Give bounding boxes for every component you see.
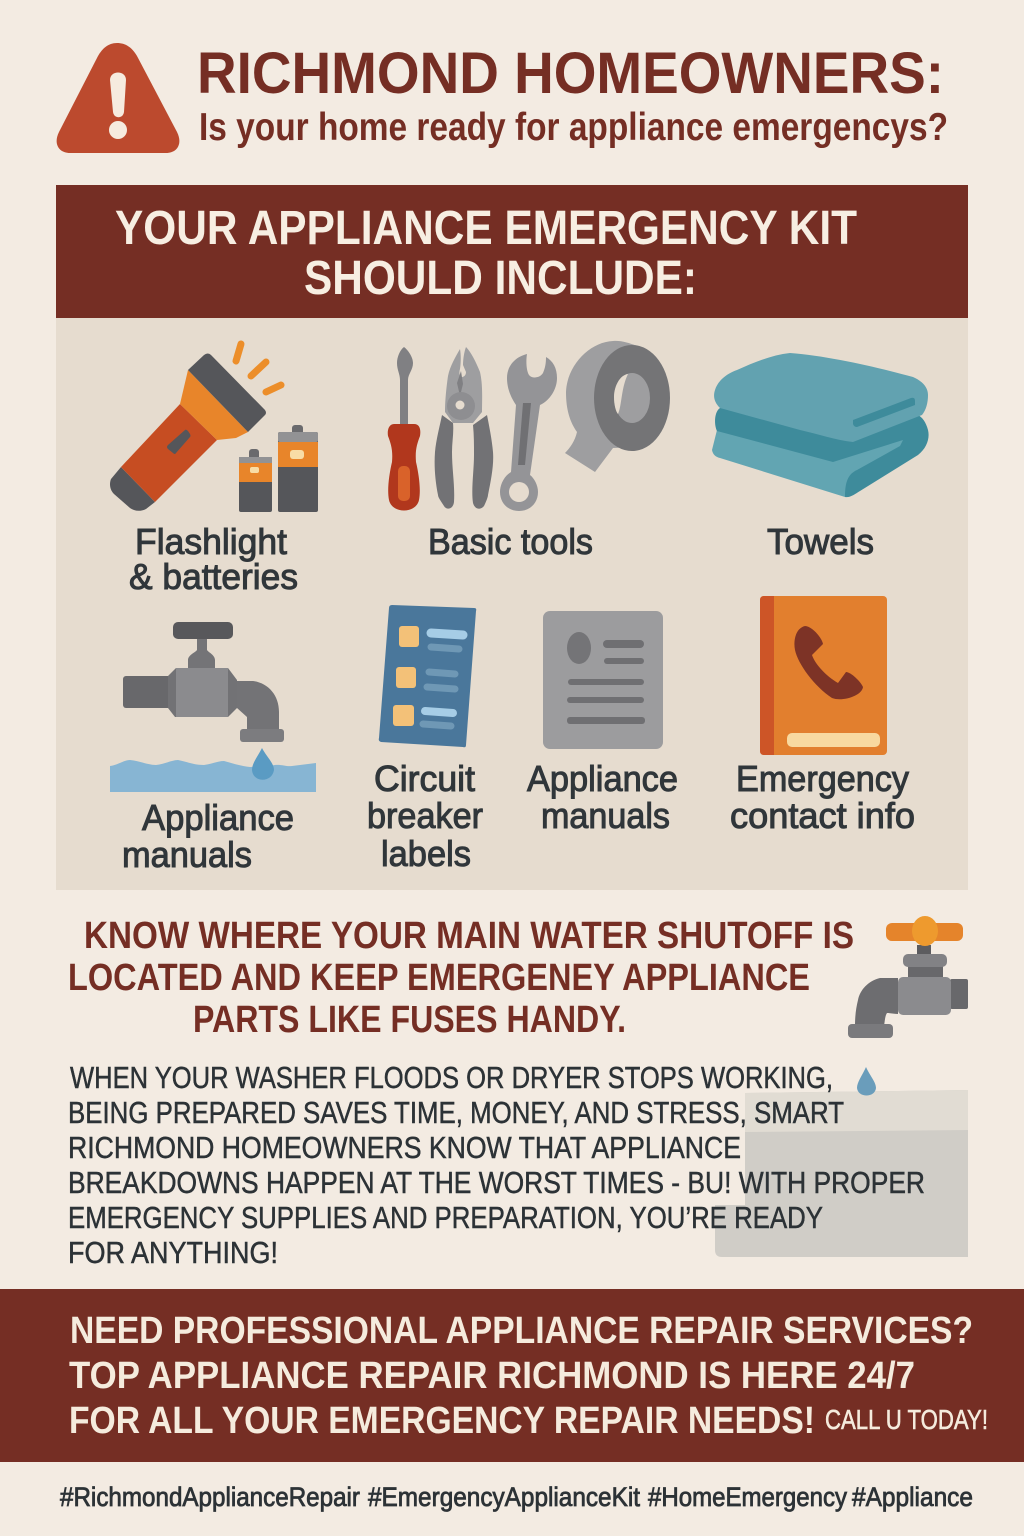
icon: circuit breaker panel (379, 605, 476, 747)
label: circuit breaker labels (367, 758, 483, 874)
call to action band (0, 1289, 1024, 1462)
label: appliance manuals: manuals (541, 795, 670, 836)
icon: leaking faucet and water (110, 622, 316, 792)
hashtags: #EmergencyApplianceKit (368, 1482, 640, 1512)
hashtags (60, 1482, 973, 1512)
icon: appliance manual document (543, 611, 663, 749)
label: circuit breaker labels: breaker (367, 795, 483, 836)
icon: warning triangle (57, 43, 179, 153)
body text: EMERGENCY SUPPLIES AND PREPARATION, YOU’RE READY (68, 1200, 823, 1235)
call to action band: FOR ALL YOUR EMERGENCY REPAIR NEEDS! (69, 1400, 815, 1442)
label: flashlight and batteries: Flashlight (135, 521, 287, 562)
duct tape (565, 341, 670, 472)
label: basic tools: Basic tools (428, 521, 593, 562)
body text: WHEN YOUR WASHER FLOODS OR DRYER STOPS WORKING, (70, 1060, 833, 1095)
hashtags: #Appliance (852, 1482, 973, 1512)
hashtags: #RichmondApplianceRepair (60, 1482, 360, 1512)
wrench (500, 354, 557, 511)
pliers (435, 347, 493, 509)
label: flashlight and batteries (129, 521, 298, 597)
icon: emergency contact book (760, 596, 887, 755)
call to action band: TOP APPLIANCE REPAIR RICHMOND IS HERE 24/7 (69, 1355, 915, 1397)
kit heading band: YOUR APPLIANCE EMERGENCY KIT (115, 202, 857, 255)
body text: BEING PREPARED SAVES TIME, MONEY, AND STRESS, SMART (68, 1095, 844, 1130)
panel background (56, 318, 968, 890)
hashtags: #HomeEmergency (648, 1482, 847, 1512)
label: emergency contact info: contact info (730, 795, 915, 836)
label: emergency contact info: Emergency (736, 758, 909, 799)
label: towels: Towels (767, 521, 874, 562)
label: appliance manuals (527, 758, 678, 836)
label: circuit breaker labels: labels (381, 833, 471, 874)
icon: flashlight and batteries (110, 344, 318, 512)
header (57, 41, 948, 153)
label: appliance manuals: Appliance (527, 758, 678, 799)
label: flashlight and batteries: & batteries (129, 556, 298, 597)
shutoff headline (68, 915, 854, 1041)
screwdriver (388, 347, 420, 510)
label: circuit breaker labels: Circuit (374, 758, 475, 799)
body text: FOR ANYTHING! (68, 1235, 278, 1270)
label: appliance manuals left (122, 797, 294, 875)
icon: basic tools (388, 341, 670, 511)
shutoff headline: KNOW WHERE YOUR MAIN WATER SHUTOFF IS (84, 915, 854, 957)
label: appliance manuals left: manuals (122, 834, 252, 875)
body text: RICHMOND HOMEOWNERS KNOW THAT APPLIANCE (68, 1130, 741, 1165)
label: emergency contact info (730, 758, 915, 836)
shutoff headline: PARTS LIKE FUSES HANDY. (193, 999, 626, 1041)
illustration: water drop and flood backdrop (715, 1067, 968, 1257)
icon: towels (712, 353, 929, 497)
shutoff headline: LOCATED AND KEEP EMERGENEY APPLIANCE (68, 957, 810, 999)
body text (68, 1060, 925, 1270)
kit heading band (56, 185, 968, 318)
label: appliance manuals left: Appliance (142, 797, 294, 838)
icon: water shutoff faucet (848, 916, 968, 1038)
panel: emergency kit (56, 185, 968, 890)
title: RICHMOND HOMEOWNERS: (197, 41, 944, 106)
kit heading band: SHOULD INCLUDE: (304, 252, 697, 305)
